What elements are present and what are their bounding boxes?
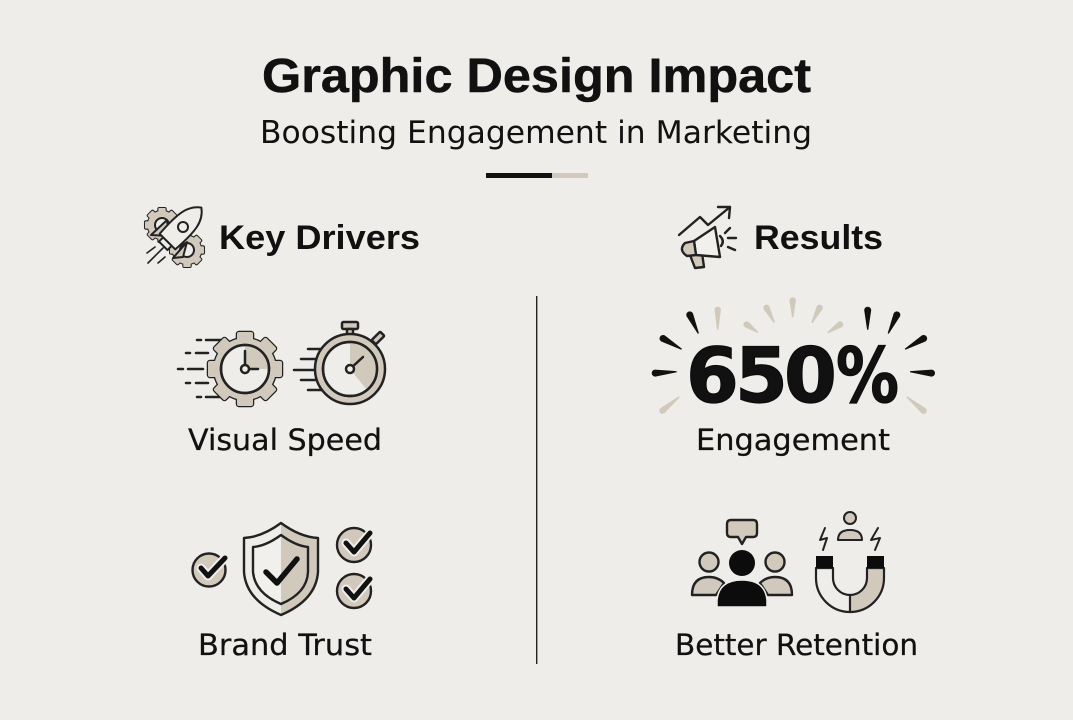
big number: percent sign: %	[836, 331, 899, 420]
title: Graphic Design Impact	[262, 50, 811, 103]
label: Engagement: Engagement	[696, 423, 890, 457]
icon: burst rays	[651, 297, 935, 415]
icon: rocket and gears	[145, 199, 210, 267]
column divider	[536, 296, 537, 664]
icon: megaphone with growth arrow	[679, 207, 736, 268]
icon: magnet attracting person	[816, 512, 884, 612]
title divider	[486, 173, 588, 178]
big number: 650%: 6	[686, 331, 739, 420]
heading: Key Drivers: Key Drivers	[219, 219, 420, 257]
icon: shield with check marks	[192, 523, 371, 615]
big number: 650%: 5	[735, 331, 788, 420]
big number: 650%: 0	[784, 331, 837, 420]
icon: gear clock with speed lines	[178, 332, 282, 406]
label: Better Retention: Better Retention	[675, 628, 918, 662]
icon: stopwatch with speed lines	[294, 322, 385, 404]
label: Visual Speed: Visual Speed	[188, 423, 382, 457]
icon: audience with speech bubble	[692, 520, 792, 607]
subtitle: Boosting Engagement in Marketing	[260, 115, 812, 151]
heading: Results: Results	[754, 219, 883, 257]
label: Brand Trust: Brand Trust	[198, 628, 372, 662]
